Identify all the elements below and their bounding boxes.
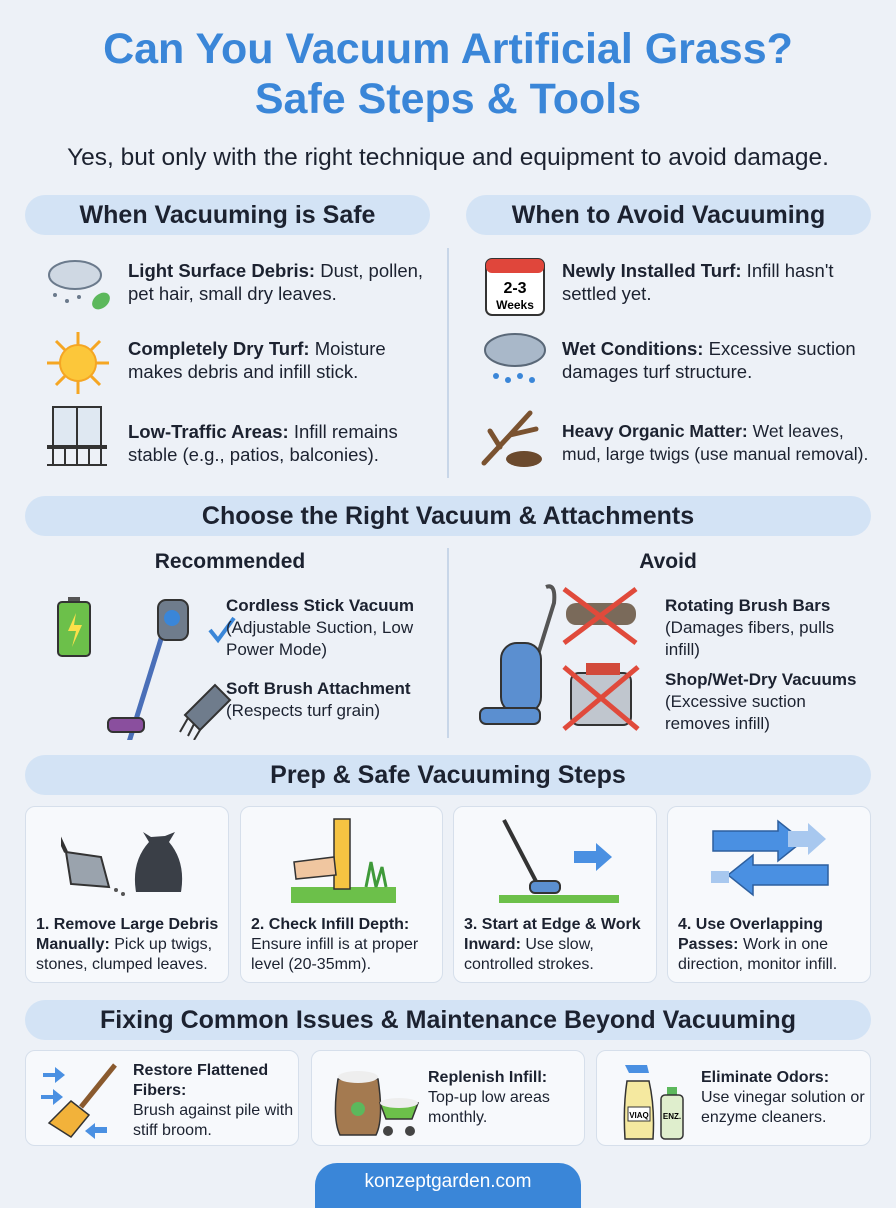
text: rotating brush: Rotating Brush Bars (665, 596, 830, 615)
text: new turf: Newly Installed Turf: Infill hasn't settled yet. (562, 260, 834, 304)
text: replenish: Top-up low areas monthly. (428, 1089, 550, 1126)
text: flattened (133, 1062, 293, 1139)
title: Can You Vacuum Artificial Grass? (103, 25, 793, 73)
icon: dustpan bag (61, 832, 182, 896)
icon: balcony (47, 406, 107, 466)
icon: spray bottles (624, 1065, 684, 1140)
text: step 4: 4. Use Overlapping Passes: Work in one direction, monitor infill. (678, 916, 837, 973)
text: cordless: Cordless Stick Vacuum (226, 596, 414, 615)
card: flattened fibers (25, 1050, 299, 1146)
icon: spray bottles: VIAQ (629, 1111, 649, 1120)
text: shop vac: (Excessive suction removes infill) (665, 692, 806, 733)
text: light debris: Light Surface Debris: Dust, pollen, pet hair, small dry leaves. (128, 260, 423, 304)
footer: website tab: konzeptgarden.com (365, 1171, 531, 1192)
text: flattened: Brush against pile with stiff broom. (133, 1102, 293, 1139)
icon: calendar (485, 258, 545, 316)
icon: branch mud (482, 410, 542, 467)
text: rotating brush (665, 596, 834, 659)
heading: choose vacuum (25, 496, 871, 536)
title (103, 25, 793, 123)
subheading: recommended: Recommended (155, 550, 305, 573)
heading: when safe (25, 195, 430, 235)
icon: calendar: Weeks (496, 298, 534, 312)
icon: spray bottles: ENZ. (663, 1112, 681, 1121)
text: odors: Use vinegar solution or enzyme cleaners. (701, 1089, 865, 1126)
text: step 3: 3. Start at Edge & Work Inward: Use slow, controlled strokes. (464, 916, 641, 973)
icon: overlapping arrows (711, 820, 829, 896)
panel: recommended (57, 550, 414, 740)
heading: when avoid (466, 195, 871, 235)
text: wet conditions: Wet Conditions: Excessive suction damages turf structure. (562, 338, 856, 382)
text: dry turf: Completely Dry Turf: Moisture makes debris and infill stick. (128, 338, 386, 382)
card: odors (596, 1050, 871, 1146)
icon: upright vacuum and brush bar crossed (479, 584, 640, 731)
text: cordless: (Adjustable Suction, Low Power Mode) (226, 618, 413, 659)
heading: steps: Prep & Safe Vacuuming Steps (270, 761, 626, 789)
card: step 3 (453, 806, 657, 983)
text: shop vac: Shop/Wet-Dry Vacuums (665, 670, 856, 689)
text: heavy organic: mud, large twigs (use manual removal). (562, 444, 868, 464)
icon: ruler turf (291, 818, 396, 903)
icon: rain cloud (484, 333, 546, 383)
subtitle: Yes, but only with the right technique and equipment to avoid damage. (67, 144, 829, 171)
panel: avoid vacuums (479, 550, 856, 733)
text: step 2: 2. Check Infill Depth: Ensure infill is at proper level (20-35mm). (251, 916, 418, 973)
subheading: avoid: Avoid (639, 550, 697, 573)
icon: sack spreader (334, 1071, 419, 1136)
icon: sun (47, 332, 109, 394)
text: heavy organic: Heavy Organic Matter: Wet leaves, (562, 421, 844, 441)
card: replenish infill (311, 1050, 585, 1146)
heading: fixing issues (25, 1000, 871, 1040)
heading: when avoid: When to Avoid Vacuuming (512, 201, 825, 229)
text: soft brush: (Respects turf grain) (226, 701, 380, 720)
card: step 4 (667, 806, 871, 983)
text: soft brush: Soft Brush Attachment (226, 679, 410, 698)
text: soft brush (226, 679, 410, 720)
footer: website tab (315, 1163, 581, 1208)
text: flattened: Restore Flattened Fibers: (133, 1062, 268, 1099)
text: replenish: Replenish Infill: (428, 1069, 547, 1086)
text: step 1: 1. Remove Large Debris Manually: Pick up twigs, stones, clumped leaves. (36, 916, 218, 973)
heading: when safe: When Vacuuming is Safe (80, 201, 375, 229)
text: cordless (226, 596, 414, 659)
heading: choose vacuum: Choose the Right Vacuum & Attachments (202, 502, 694, 530)
heading: fixing issues: Fixing Common Issues & Maintenance Beyond Vacuuming (100, 1006, 796, 1034)
icon: stick vacuum (107, 599, 236, 740)
card: step 2 (240, 806, 443, 983)
icon: vacuum edge arrow (499, 819, 619, 903)
icon: battery (57, 597, 91, 657)
heading: steps (25, 755, 871, 795)
card: step 1 (25, 806, 229, 983)
panel: safe conditions (47, 260, 423, 466)
text: heavy organic (562, 421, 868, 464)
text: shop vac (665, 670, 856, 733)
text: odors: Eliminate Odors: (701, 1069, 829, 1086)
title: Safe Steps & Tools (255, 75, 641, 123)
text: low traffic: Low-Traffic Areas: Infill remains stable (e.g., patios, balconies). (128, 421, 398, 465)
panel: avoid conditions (482, 258, 868, 467)
text: replenish (428, 1069, 550, 1126)
icon: cloud leaf (48, 260, 110, 310)
icon: calendar: 2-3 (503, 280, 527, 297)
icon: broom (41, 1063, 117, 1139)
text: rotating brush: (Damages fibers, pulls infill) (665, 618, 834, 659)
text: odors (701, 1069, 865, 1126)
